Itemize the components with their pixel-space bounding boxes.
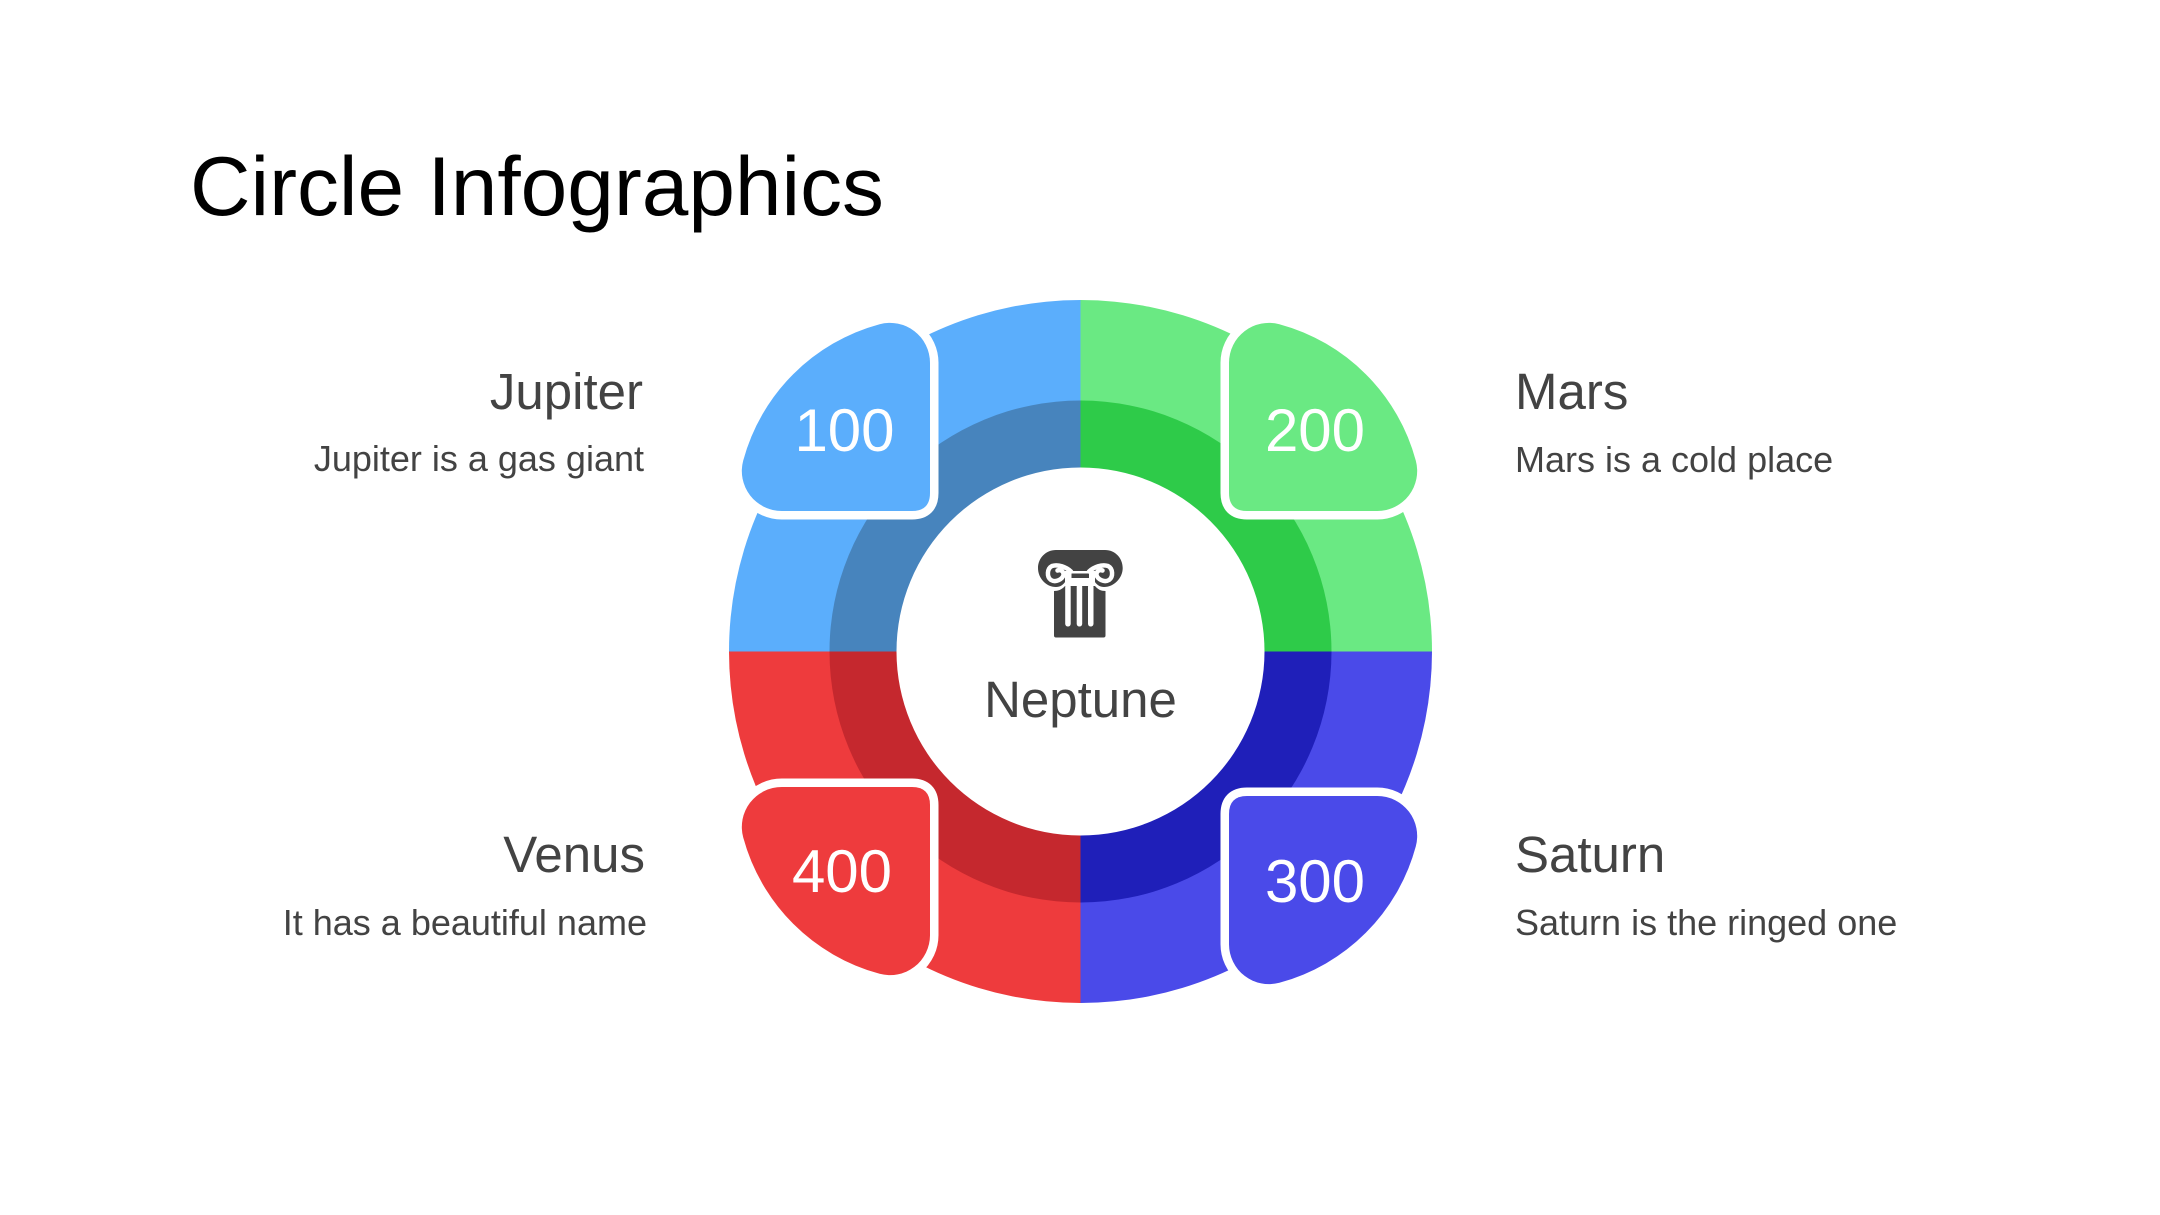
label: Saturn: Saturn <box>1515 826 1665 883</box>
segment: Saturn <box>1080 652 1432 1003</box>
tile: 100 <box>742 323 930 511</box>
label: Jupiter: Jupiter is a gas giant <box>314 438 644 479</box>
tile: 300: 300 <box>1265 848 1365 915</box>
tile: 200: 200 <box>1265 397 1365 464</box>
label: Jupiter <box>314 363 644 479</box>
label: Mars <box>1515 363 1833 480</box>
center circle <box>896 468 1264 836</box>
icon: ionic column <box>1038 550 1123 638</box>
label: Mars: Mars is a cold place <box>1515 439 1833 480</box>
tile: 200 <box>1229 323 1417 511</box>
label: Saturn: Saturn is the ringed one <box>1515 902 1897 943</box>
tile: 400: 400 <box>792 838 892 905</box>
label: Saturn <box>1515 826 1897 943</box>
label: Jupiter: Jupiter <box>490 363 643 420</box>
title: Circle Infographics <box>190 139 884 233</box>
label: Venus: Venus <box>503 826 645 883</box>
label: Mars: Mars <box>1515 363 1628 420</box>
label: Venus <box>283 826 647 943</box>
label: Venus: It has a beautiful name <box>283 902 647 943</box>
segment: Mars <box>1080 300 1432 652</box>
center label: Neptune <box>984 671 1177 728</box>
tile: 300 <box>1229 796 1417 984</box>
ring chart <box>729 300 1432 1003</box>
tile: 100: 100 <box>794 397 895 464</box>
segment: Venus <box>729 652 1080 1003</box>
tile: 400 <box>742 787 930 975</box>
segment: Jupiter <box>729 300 1080 652</box>
